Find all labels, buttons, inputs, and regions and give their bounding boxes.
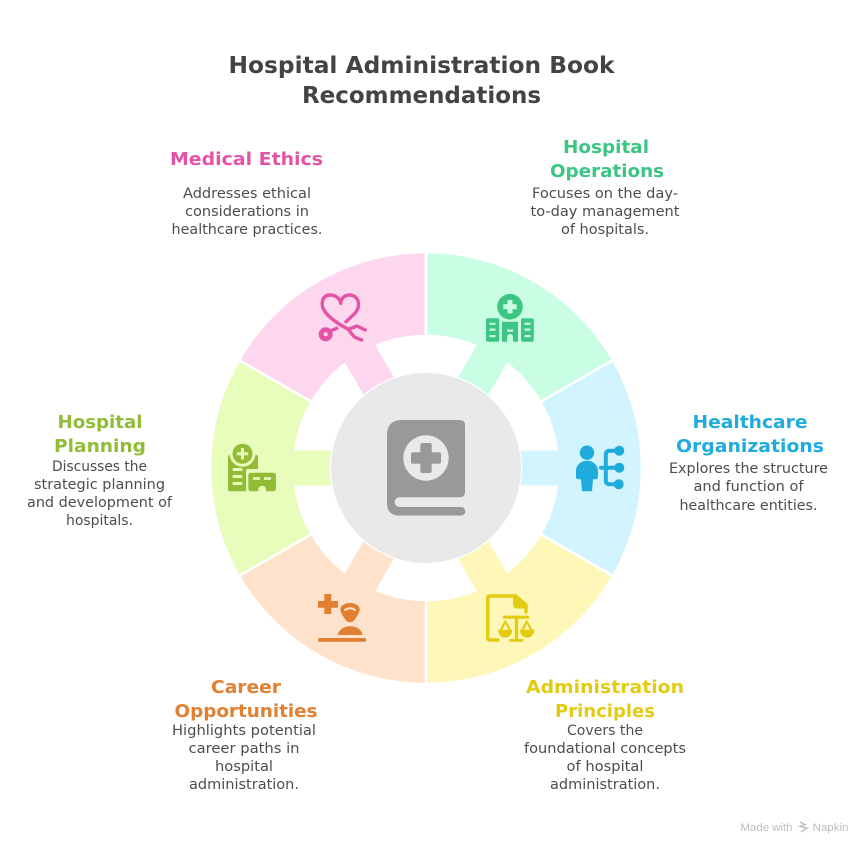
icon: hospital complex [228,441,276,491]
description: healthcare organizations: Explores the structure [669,461,828,477]
heading: healthcare organizations [676,412,824,457]
heading: career opportunities: Career [211,677,281,698]
segment: medical ethics [224,227,473,441]
description: administration principles: Covers the [567,723,643,739]
heading: hospital operations: Hospital [563,137,649,158]
description: hospital operations: Focuses on the day- [532,186,678,202]
description: career opportunities: administration. [189,777,299,793]
description: career opportunities: hospital [215,759,273,775]
description: hospital planning [27,459,173,529]
heading: hospital planning: Planning [54,436,146,457]
description: medical ethics [172,186,322,238]
icon: hospital building [486,294,534,342]
description: career opportunities: Highlights potential [172,723,316,739]
heading: healthcare organizations: Organizations [676,436,824,457]
segment: hospital planning [210,360,333,576]
heading: career opportunities: Opportunities [174,701,318,722]
title: Hospital Administration Book [228,53,615,79]
heading: administration principles [526,677,684,722]
description: hospital operations: of hospitals. [561,222,649,238]
heading: hospital planning [54,412,146,457]
segment: healthcare organizations [519,360,642,576]
watermark: made with napkin: Made with [740,822,792,834]
heading: hospital planning: Hospital [58,412,142,433]
description: career opportunities [172,723,316,793]
segment: administration principles [379,495,628,709]
description: career opportunities: career paths in [188,741,300,757]
title: Recommendations [302,83,541,109]
heading: hospital operations: Operations [550,161,664,182]
segment: career opportunities [224,495,473,709]
panel: medical ethics [170,149,473,441]
heading: career opportunities [174,677,318,722]
icon: document with scales [488,594,534,642]
panel: healthcare organizations [519,360,828,576]
heading: administration principles: Administration [526,677,684,698]
description: administration principles: foundational concepts [524,741,686,757]
icon: person with network [576,446,624,491]
watermark: made with napkin [740,822,848,834]
description: medical ethics: Addresses ethical [183,186,311,202]
center hub with book icon [331,373,521,563]
description: medical ethics: considerations in [185,204,309,220]
panel: administration principles [379,495,686,793]
description: administration principles [524,723,686,793]
title [228,53,615,109]
description: hospital planning: and development of [27,495,173,511]
heading: medical ethics: Medical Ethics [170,149,323,170]
heading: administration principles: Principles [555,701,655,722]
icon: stethoscope heart [319,295,365,341]
heading: healthcare organizations: Healthcare [692,412,808,433]
description: hospital operations [530,186,680,238]
watermark: made with napkin: Napkin [812,822,848,834]
description: hospital planning: hospitals. [66,513,133,529]
description: hospital planning: strategic planning [34,477,165,493]
heading: hospital operations [550,137,664,182]
description: hospital planning: Discusses the [52,459,147,475]
description: healthcare organizations: healthcare entities. [680,498,818,514]
description: healthcare organizations: and function of [694,479,805,495]
icon: medical professional [318,594,366,642]
panel: hospital planning [27,360,333,576]
icon: medical book [387,420,465,516]
segment: hospital operations [379,227,628,441]
description: healthcare organizations [669,461,828,514]
description: medical ethics: healthcare practices. [172,222,322,238]
panel: hospital operations [379,137,680,441]
description: administration principles: of hospital [566,759,644,775]
description: administration principles: administration. [550,777,660,793]
description: hospital operations: to-day management [530,204,680,220]
panel: career opportunities [172,495,473,793]
